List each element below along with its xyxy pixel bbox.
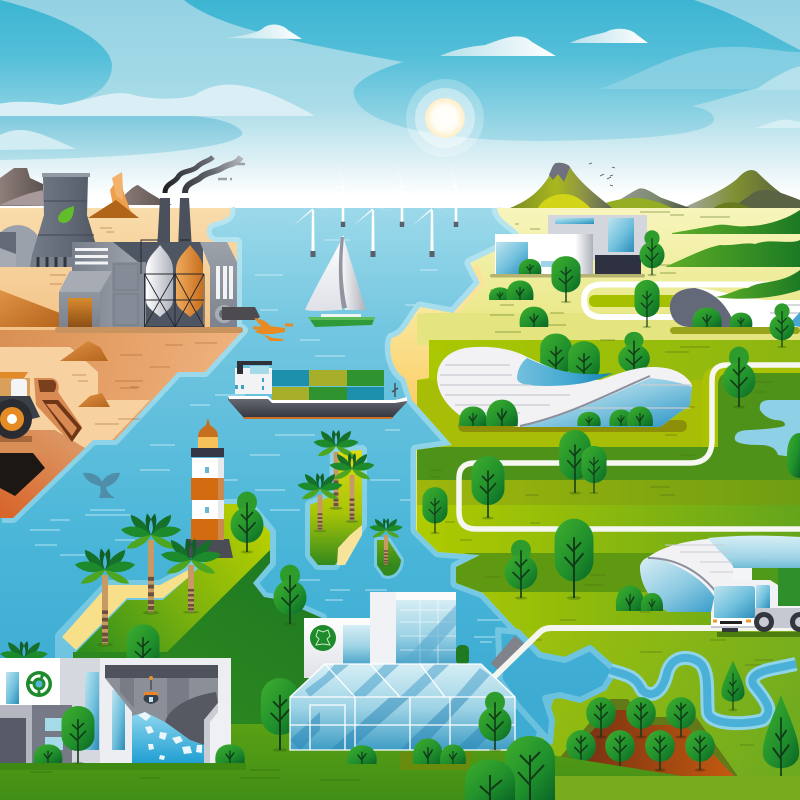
small island with palm [369, 518, 403, 576]
cloud: white small 2 [440, 36, 556, 56]
palms on coast [0, 514, 221, 669]
sand strip [62, 568, 192, 650]
inland lake [735, 400, 800, 458]
ground plinth [55, 327, 243, 333]
factory [55, 198, 293, 341]
land strata [380, 200, 800, 800]
orange foot [0, 430, 85, 518]
bushes and trees behind dome [540, 332, 650, 393]
island sand [337, 525, 362, 565]
wind turbines [294, 164, 475, 257]
factory back wall [113, 242, 203, 327]
dark slope [73, 550, 322, 730]
windows [6, 672, 19, 704]
crane pit [105, 665, 218, 763]
sailboat [305, 235, 375, 327]
coal pit [0, 453, 45, 496]
green terraces [665, 210, 800, 267]
water ripples [30, 240, 757, 715]
cloud: pale long [0, 85, 315, 116]
icon: leather badge [310, 625, 336, 651]
birds [589, 163, 615, 186]
bottom meadow [0, 724, 800, 800]
big foreground tree, right [505, 736, 555, 800]
cloud: white small right [755, 120, 800, 128]
mountains: right [510, 163, 800, 208]
road lower with bridge [494, 628, 800, 677]
truck [711, 568, 800, 637]
factory panel wall [112, 262, 146, 327]
brown hill [0, 290, 60, 327]
whale tail [83, 473, 120, 498]
water with ice [132, 712, 204, 763]
wall edge right [204, 703, 231, 763]
sand upper [0, 208, 237, 332]
silo frame [141, 240, 204, 327]
halo [60, 504, 322, 660]
orchard trees [566, 660, 799, 785]
cloud: top-left blue [0, 0, 112, 105]
shore halo right [390, 208, 560, 790]
factory louvres [75, 250, 108, 263]
cloud: pale right [600, 47, 800, 89]
sand dashes [50, 228, 217, 424]
front trees and bushes right [347, 692, 555, 800]
futuristic dome building [437, 347, 692, 432]
front trees and bushes left [34, 678, 299, 764]
panel: industrial sand coast [0, 208, 243, 518]
chimneys [157, 198, 192, 250]
lime slope [76, 504, 270, 652]
road middle serpentine [459, 365, 800, 529]
river [610, 658, 796, 723]
sun [406, 79, 484, 157]
orange silo [176, 245, 203, 317]
icon: leaf badge [58, 206, 74, 223]
island with palms [298, 430, 374, 565]
big foreground tree, left [465, 760, 515, 800]
factory door [68, 298, 92, 327]
dump truck [0, 372, 40, 442]
dashes on land [430, 212, 780, 760]
cloud: white small 1 [225, 25, 302, 39]
greenhouse [290, 664, 515, 750]
cloud: pale small left [0, 130, 76, 150]
icon: recycling badge [26, 671, 52, 697]
cooling tower [30, 173, 100, 267]
lower block [0, 705, 72, 763]
tannery building with greenhouse [290, 592, 515, 750]
sky [0, 0, 800, 212]
rock formation orange [88, 172, 139, 218]
silver silo [146, 245, 173, 317]
lighthouse land [60, 504, 322, 730]
bay [498, 630, 615, 742]
cloud: lower-left blue [0, 116, 242, 160]
waste pile [165, 692, 218, 745]
oil spill [254, 318, 285, 341]
dome tank [0, 225, 38, 267]
house on the hill [490, 215, 647, 278]
upper-right grey building [670, 270, 800, 334]
upper-right trees and bushes [422, 230, 800, 611]
rock pile 1 [60, 341, 108, 361]
rock pile 2 [78, 393, 110, 407]
discharge pipe [215, 305, 260, 323]
mountains: left [0, 168, 172, 206]
road upper loop [584, 284, 800, 317]
inner lime road loop [589, 295, 674, 307]
quarry steps [0, 378, 82, 458]
cargo ship [228, 361, 407, 419]
factory upper block [72, 242, 138, 327]
recycling building [0, 658, 231, 763]
cloud: white small 3 [570, 29, 648, 43]
light sand zone [0, 347, 150, 518]
panel: green sustainable land [380, 200, 800, 800]
shore halo [2, 208, 243, 518]
second dome building [640, 536, 800, 612]
factory smoke [165, 157, 245, 193]
factory house [59, 271, 112, 327]
sea [0, 208, 800, 800]
sand lower peach [0, 330, 243, 518]
coast trees [126, 492, 306, 681]
crane claw [144, 676, 158, 704]
orchard soil [555, 699, 737, 777]
lighthouse [184, 418, 233, 558]
cloud band: upper blue [184, 0, 800, 141]
dome foreground bushes [459, 400, 653, 426]
factory right block [200, 242, 237, 327]
